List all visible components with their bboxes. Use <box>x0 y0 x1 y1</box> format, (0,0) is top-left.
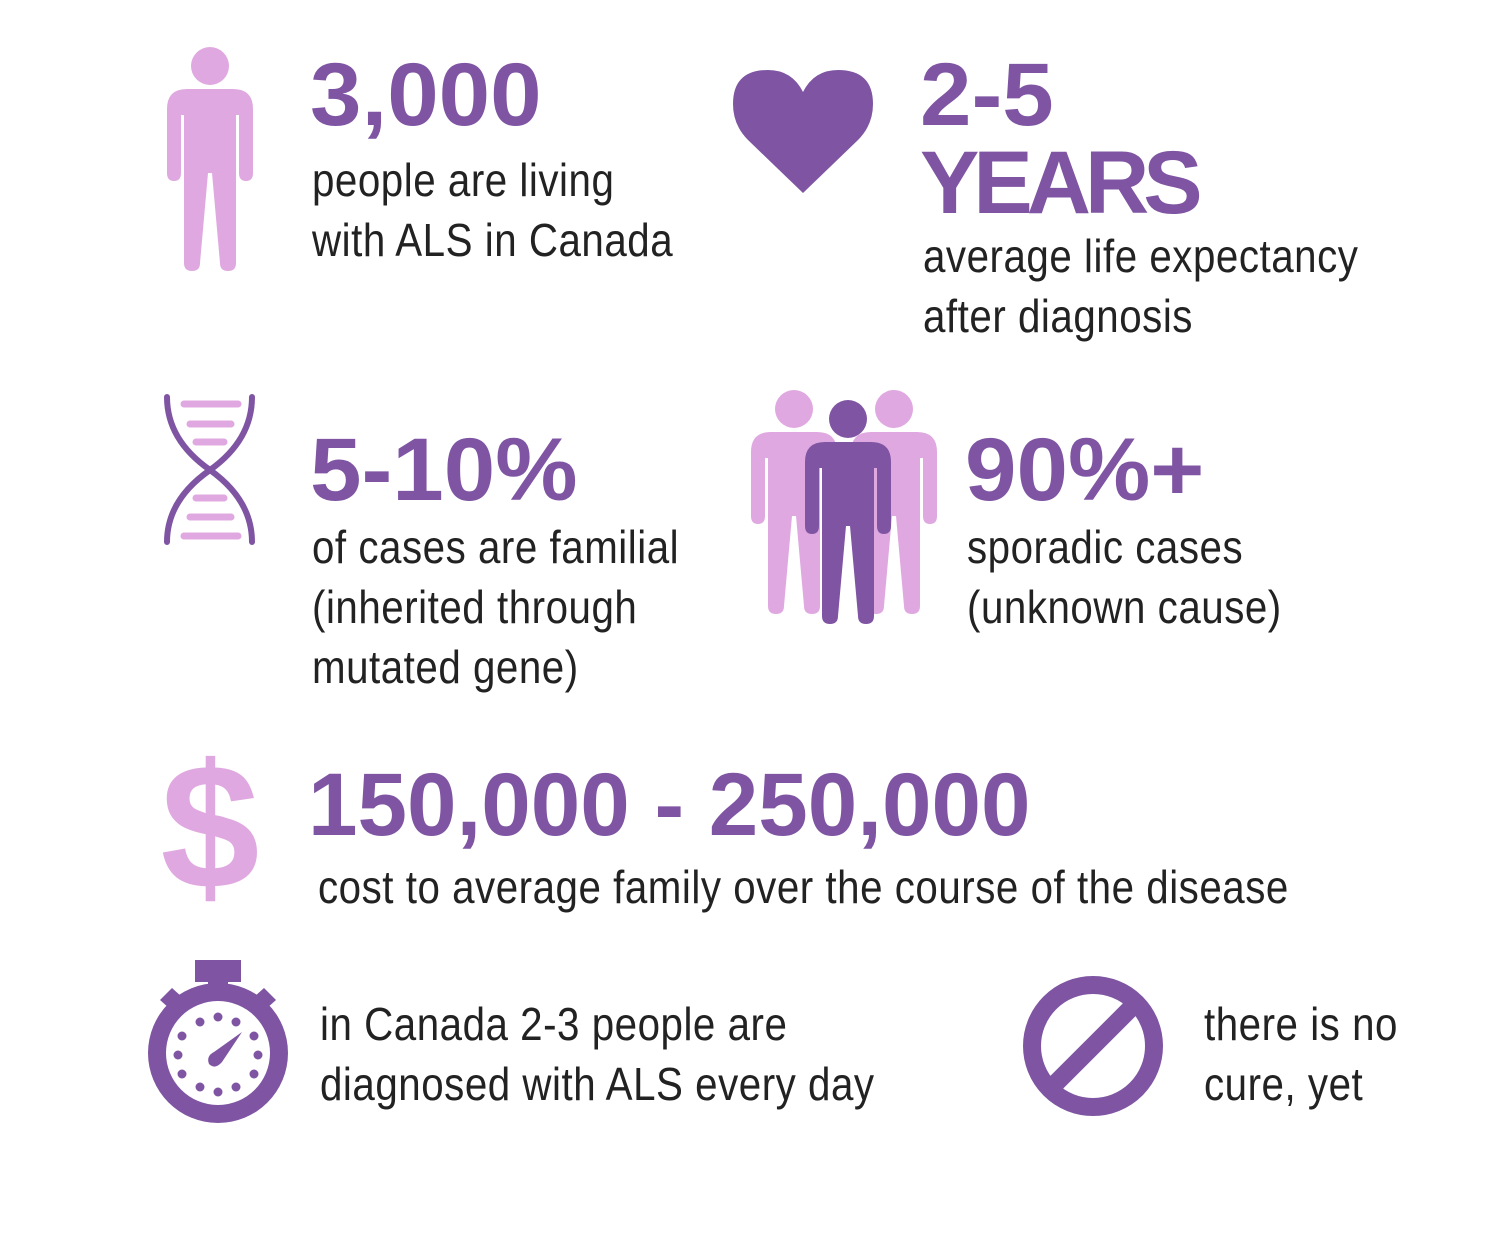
icon: heart <box>733 70 873 193</box>
text: sporadic cases: (unknown cause) <box>967 581 1282 633</box>
text: familial cases: of cases are familial <box>312 521 679 573</box>
text: no cure: cure, yet <box>1204 1058 1363 1110</box>
text: living with ALS: people are living <box>312 154 614 206</box>
text: no cure <box>1204 998 1398 1110</box>
text: familial cases <box>312 521 679 693</box>
text: sporadic cases: sporadic cases <box>967 521 1243 573</box>
text: familial cases: (inherited through <box>312 581 637 633</box>
stat: cost: 150,000 - 250,000 <box>308 754 1031 854</box>
text: sporadic cases <box>967 521 1282 633</box>
icon: group of people <box>751 390 937 624</box>
stat: YEARS: YEARS <box>920 132 1197 232</box>
text: living with ALS <box>312 154 673 266</box>
icon: no symbol <box>1032 985 1154 1107</box>
text: life expectancy: after diagnosis <box>923 290 1193 342</box>
text: no cure: there is no <box>1204 998 1398 1050</box>
text: diagnosed every day: diagnosed with ALS every day <box>320 1058 875 1110</box>
stat: 3,000: 3,000 <box>310 44 542 144</box>
text: life expectancy <box>923 230 1358 342</box>
text: cost description: cost to average family over the course of the disease <box>318 861 1289 913</box>
text: diagnosed every day: in Canada 2-3 people are <box>320 998 787 1050</box>
text: diagnosed every day <box>320 998 875 1110</box>
icon: stopwatch <box>148 960 288 1123</box>
stat: 90%+: 90%+ <box>965 419 1204 519</box>
stat: 5-10%: 5-10% <box>310 419 578 519</box>
text: familial cases: mutated gene) <box>312 641 579 693</box>
icon: dollar: $ <box>160 727 260 926</box>
icon: person <box>167 47 253 271</box>
text: life expectancy: average life expectancy <box>923 230 1358 282</box>
icon: dna <box>167 397 252 542</box>
text: living with ALS: with ALS in Canada <box>312 214 673 266</box>
stat: 2-5: 2-5 <box>920 44 1054 144</box>
